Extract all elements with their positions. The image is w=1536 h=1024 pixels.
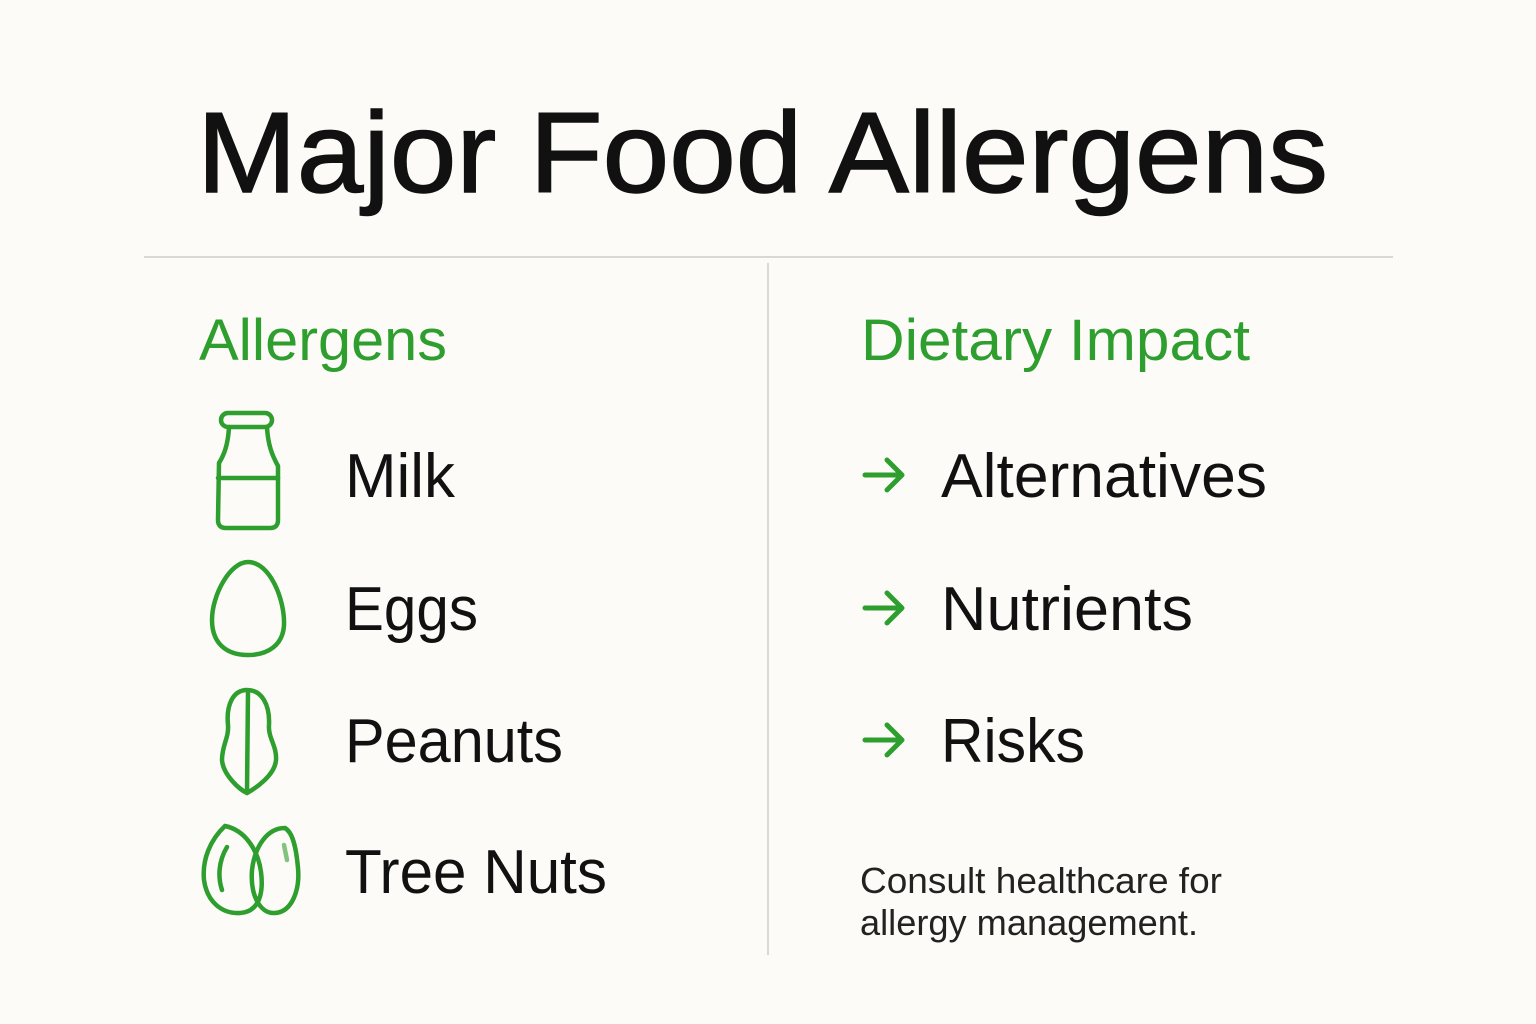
icon: milk bottle xyxy=(218,413,278,528)
footer note: allergy management. xyxy=(860,902,1198,943)
arrow: nutrients xyxy=(865,593,902,623)
label: peanuts: Peanuts xyxy=(345,707,563,776)
icon: peanut xyxy=(222,690,276,793)
label: eggs: Eggs xyxy=(345,575,478,644)
arrow: risks xyxy=(865,725,902,755)
label: risks: Risks xyxy=(941,707,1085,776)
title: Major Food Allergens xyxy=(197,90,1328,217)
label: tree nuts: Tree Nuts xyxy=(345,838,607,907)
icon: tree nuts xyxy=(204,826,298,913)
footer note: Consult healthcare for xyxy=(860,860,1222,901)
heading: dietary impact: Dietary Impact xyxy=(861,308,1250,373)
heading: allergens: Allergens xyxy=(199,308,447,373)
icon: egg xyxy=(212,562,284,655)
label: milk: Milk xyxy=(345,442,456,511)
arrow: alternatives xyxy=(865,460,902,490)
panel: allergens xyxy=(199,308,607,913)
label: nutrients: Nutrients xyxy=(941,575,1193,644)
panel: dietary impact xyxy=(860,308,1267,943)
label: alternatives: Alternatives xyxy=(941,442,1267,511)
footer note xyxy=(860,860,1222,943)
